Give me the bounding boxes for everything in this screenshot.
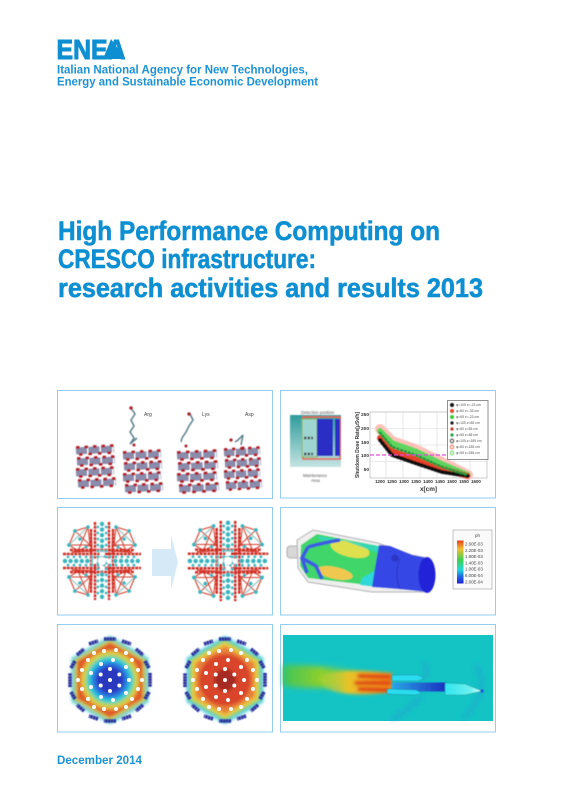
panel: shutdown dose rate chart [280,390,496,498]
chart legend: φ=80 z=185 cm [456,445,480,449]
chart legend: φ=105 z=185 cm [456,439,482,443]
y axis title: Shutdown Dose Rate[μSv/h] [355,412,361,478]
x axis labels: 1400 [423,479,433,484]
reactor map left [70,636,150,724]
title: CRESCO infrastructure: [58,244,316,274]
colour scale legend: ph [475,533,480,538]
transition arrow [152,535,178,590]
molecular slabs [76,446,262,492]
title: research activities and results 2013 [58,273,483,303]
agency name [57,62,318,88]
y axis labels: 100 [361,453,369,459]
colour scale legend: 2.20E-03 [465,548,483,553]
chart grid and axes [370,412,487,478]
chart legend: φ=105 z=-23 cm [456,403,481,407]
y axis labels [361,412,369,473]
chart legend: φ=55 z=85 cm [456,433,478,437]
x axis labels: 1350 [411,479,421,484]
panel: combustor CFD [280,508,496,615]
chart legend: φ=80 z=85 cm [456,427,478,431]
title [58,216,483,303]
rocket [387,675,484,695]
y axis labels: 200 [361,426,369,432]
colour scale legend: 1.80E-03 [465,554,483,559]
schematic: detection position: Area [311,478,321,483]
colour scale legend: 2.60E-03 [465,542,483,546]
amino acid chains [129,406,244,450]
amino acid labels: Arg [144,412,152,418]
panel: reactor core maps [58,624,272,732]
y axis labels: 50 [364,467,369,473]
panel: launcher CFD [280,624,496,732]
schematic: detection position [290,410,341,483]
colour scale legend [453,530,492,589]
exhaust plume [283,665,392,694]
threshold line [370,454,448,456]
chart legend: φ=55 z=-23 cm [456,415,479,419]
shock waves [392,662,482,720]
title: High Performance Computing on [58,216,440,246]
flow field background [283,635,493,721]
x axis labels: 1550 [459,479,469,484]
x axis labels: 1450 [435,479,445,484]
data points [380,429,468,476]
schematic: detection position: Detection position [301,410,335,415]
chart legend: φ=55 z=185 cm [456,451,480,455]
x axis title: x[cm] [420,486,437,493]
x axis labels [375,479,481,484]
chart legend [448,400,488,460]
colour scale legend: 2.00E-04 [465,580,483,584]
crystal before [63,522,141,600]
crystal after [188,521,268,601]
x axis labels: 1500 [447,479,457,484]
chart legend: φ=105 z=85 cm [456,421,480,425]
chart legend: φ=80 z=-35 cm [456,409,479,413]
agency name: Energy and Sustainable Economic Development [57,74,318,88]
x axis labels: 1250 [387,479,397,484]
y axis labels: 250 [361,412,369,418]
x axis labels: 1200 [375,479,385,484]
y axis labels: 150 [361,440,369,446]
amino acid labels: Asp [245,412,254,418]
amino acid labels [144,412,254,418]
logo: ENEA: ENEA [56,34,126,65]
date: December 2014 [57,755,143,767]
x axis labels: 1300 [399,479,409,484]
panel: surface molecular models [58,390,272,498]
schematic: detection position: Maintenance [303,473,328,478]
reactor map right [185,636,265,724]
combustor model [287,530,436,593]
agency name: Italian National Agency for New Technologies, [57,62,308,76]
x axis labels: 1600 [471,479,481,484]
colour scale legend: 1.00E-03 [465,566,483,572]
colour scale legend: 6.00E-04 [465,573,483,578]
panel: crystal structures [58,508,272,615]
colour scale legend: 1.40E-03 [465,560,483,566]
amino acid labels: Lys [202,412,210,418]
